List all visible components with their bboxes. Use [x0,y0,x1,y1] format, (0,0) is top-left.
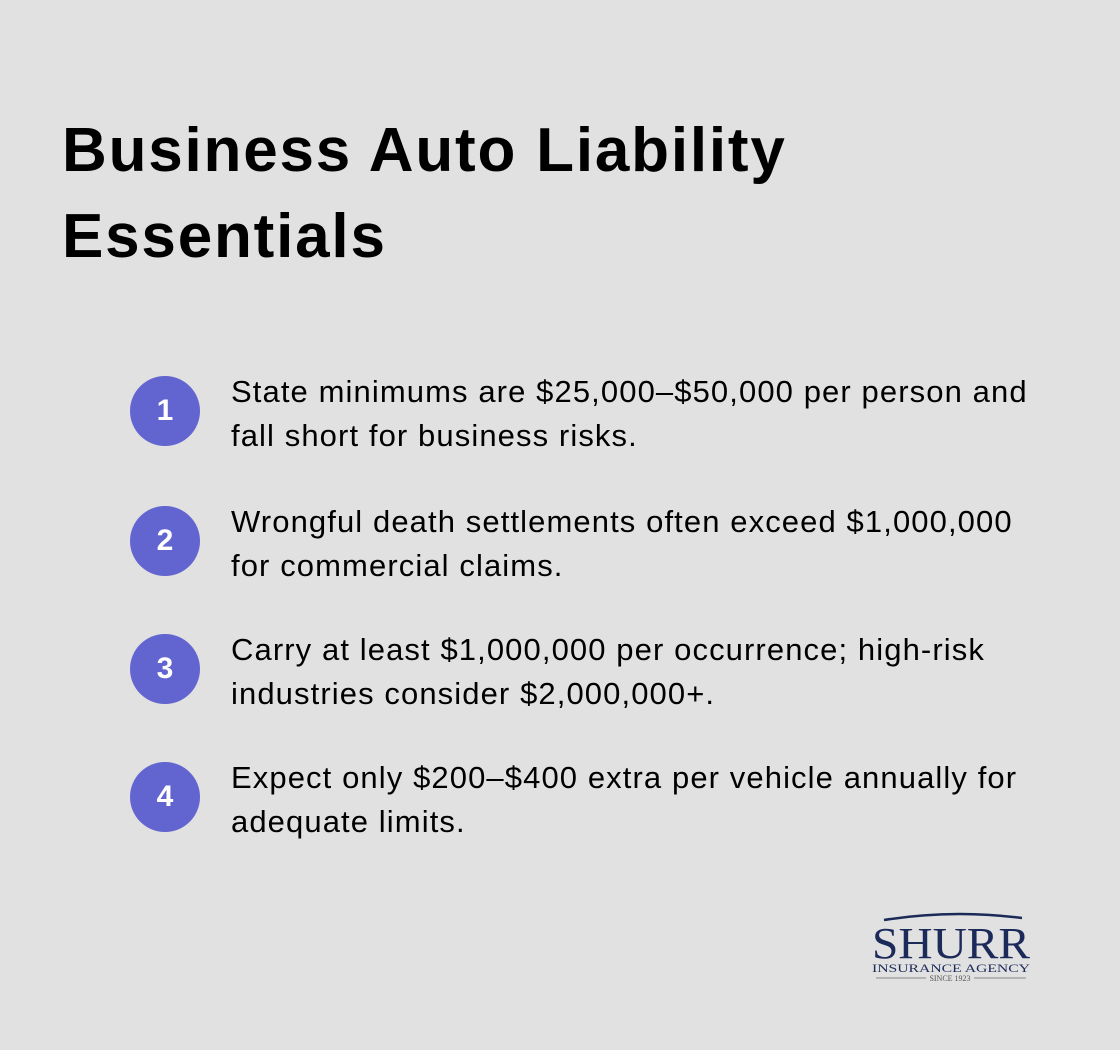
title: Business Auto Liability [62,116,787,185]
item 1 [130,374,1028,453]
badge 1 [130,376,200,446]
text 1: fall short for business risks. [231,418,638,453]
badge 3 [130,634,200,704]
text 3: Carry at least $1,000,000 per occurrence; high-risk [231,632,985,667]
logo: SINCE 1923 [929,974,971,983]
badge 1: 1 [157,394,173,427]
item 2 [130,504,1013,583]
badge 4: 4 [157,780,173,813]
title: Essentials [62,202,387,271]
text 2: for commercial claims. [231,548,564,583]
text 4: Expect only $200–$400 extra per vehicle annually for [231,760,1017,795]
badge 2: 2 [157,524,173,557]
logo [872,912,1031,983]
item 3 [130,632,985,711]
badge 4 [130,762,200,832]
badge 2 [130,506,200,576]
text 1: State minimums are $25,000–$50,000 per person and [231,374,1028,409]
logo: INSURANCE AGENCY [872,961,1030,975]
text 4 [231,760,1017,839]
text 3: industries consider $2,000,000+. [231,676,715,711]
badge 3: 3 [157,652,173,685]
logo: SHURR [872,919,1031,968]
text 2: Wrongful death settlements often exceed $1,000,000 [231,504,1013,539]
item 4 [130,760,1017,839]
text 4: adequate limits. [231,804,466,839]
text 2 [231,504,1013,583]
title [62,116,787,271]
text 1 [231,374,1028,453]
text 3 [231,632,985,711]
